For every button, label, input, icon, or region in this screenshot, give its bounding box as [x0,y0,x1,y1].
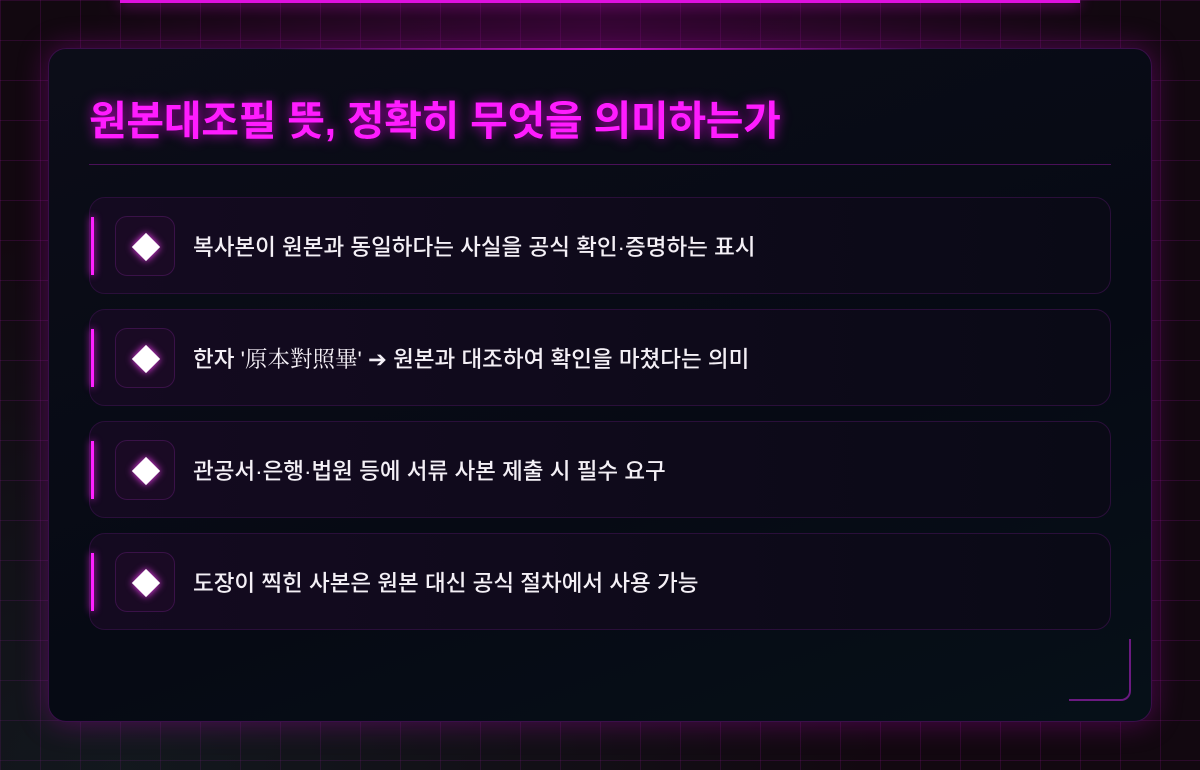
text 4: 도장이 찍힌 사본은 원본 대신 공식 절차에서 사용 가능 [193,571,698,596]
text 1: 복사본이 원본과 동일하다는 사실을 공식 확인·증명하는 표시 [193,235,756,260]
icon: diamond [115,440,175,500]
item 3 [89,421,1111,518]
icon: diamond [115,328,175,388]
item 1 [89,197,1111,294]
icon: diamond [115,216,175,276]
text 3: 관공서·은행·법원 등에 서류 사본 제출 시 필수 요구 [193,459,666,484]
item 2 [89,309,1111,406]
text 2: 한자 '原本對照畢' ➔ 원본과 대조하여 확인을 마쳤다는 의미 [193,347,749,372]
item 4 [89,533,1111,630]
title: 원본대조필 뜻, 정확히 무엇을 의미하는가 [89,98,781,144]
icon: diamond [115,552,175,612]
